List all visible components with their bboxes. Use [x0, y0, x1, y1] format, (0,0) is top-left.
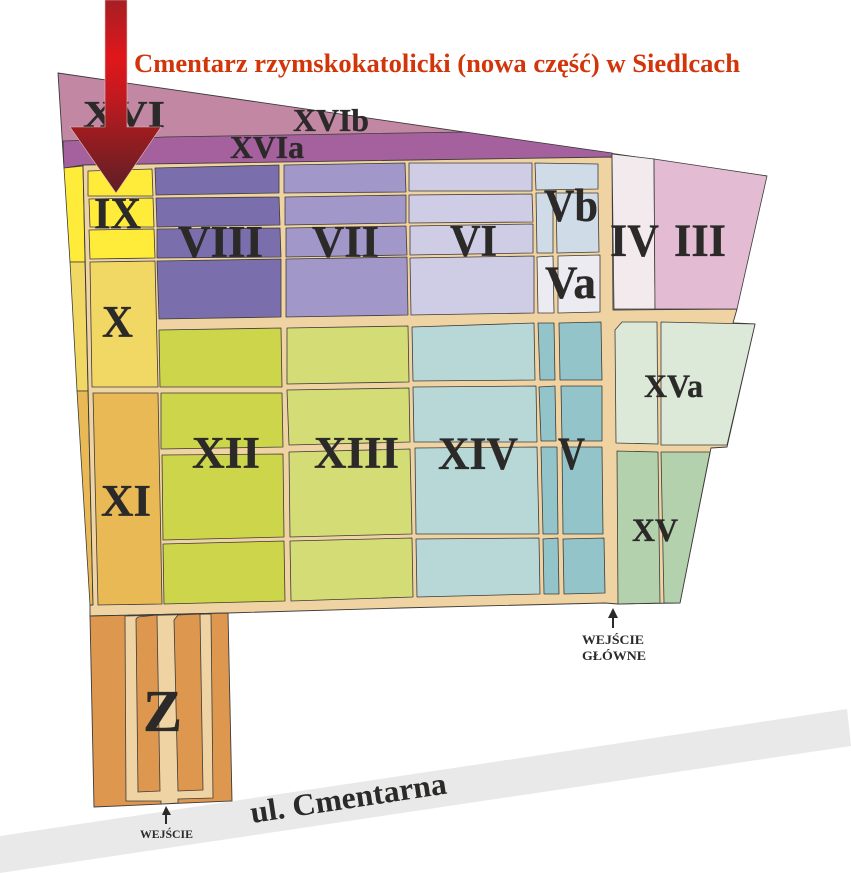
- section labels: XVa: [644, 369, 703, 405]
- alley network: [83, 157, 755, 616]
- section XIII plots: [287, 326, 413, 601]
- section XVa plots: [615, 322, 755, 445]
- section labels: VIII: [178, 217, 263, 267]
- side entrance marker: [140, 806, 193, 841]
- section XI plot: [93, 393, 162, 605]
- main entrance marker: GŁÓWNE: [582, 648, 646, 663]
- section V plots: [538, 322, 605, 594]
- section IV plot: [612, 154, 655, 309]
- section VI plots: [409, 163, 534, 315]
- section labels: IV: [610, 215, 659, 267]
- section VII plots: [284, 163, 408, 317]
- main entrance marker: [582, 608, 646, 663]
- section labels: XVIa: [230, 129, 304, 165]
- section labels: [83, 94, 726, 744]
- title: Cmentarz rzymskokatolicki (nowa część) w Siedlcach: [134, 48, 740, 78]
- section III plot: [654, 159, 767, 309]
- section X plot: [90, 261, 158, 387]
- section labels: VI: [450, 216, 497, 266]
- big red arrow: [70, 0, 161, 193]
- section XVIa band: [63, 132, 612, 168]
- section XIV plots: [412, 323, 540, 597]
- section VIII plots: [155, 165, 281, 319]
- road: ul. Cmentarna: [0, 709, 851, 873]
- section XVIb background: [58, 73, 767, 176]
- section labels: Va: [545, 257, 596, 309]
- section labels: XVIb: [293, 102, 369, 138]
- section labels: Z: [143, 678, 182, 744]
- section labels: XI: [101, 476, 151, 526]
- section Va plots: [537, 255, 600, 313]
- section Vb plots: [535, 163, 599, 253]
- road: ul. Cmentarna: ul. Cmentarna: [248, 766, 449, 830]
- section IX plots: [88, 169, 155, 259]
- section labels: XII: [192, 428, 260, 478]
- section labels: XIV: [438, 428, 518, 480]
- section Z: [90, 613, 232, 807]
- section XV plots: [617, 451, 710, 604]
- section labels: XVI: [83, 94, 165, 136]
- section labels: V: [558, 428, 585, 480]
- main entrance marker: WEJŚCIE: [582, 632, 644, 647]
- left outer strips: [64, 166, 93, 605]
- section labels: VII: [312, 217, 379, 267]
- section labels: XIII: [314, 428, 399, 478]
- section labels: III: [674, 215, 726, 267]
- section XII plots: [159, 328, 285, 604]
- section labels: X: [102, 297, 133, 347]
- section labels: IX: [94, 189, 141, 238]
- section labels: Vb: [544, 180, 598, 232]
- side entrance marker: WEJŚCIE: [140, 827, 193, 841]
- section labels: XV: [632, 513, 678, 549]
